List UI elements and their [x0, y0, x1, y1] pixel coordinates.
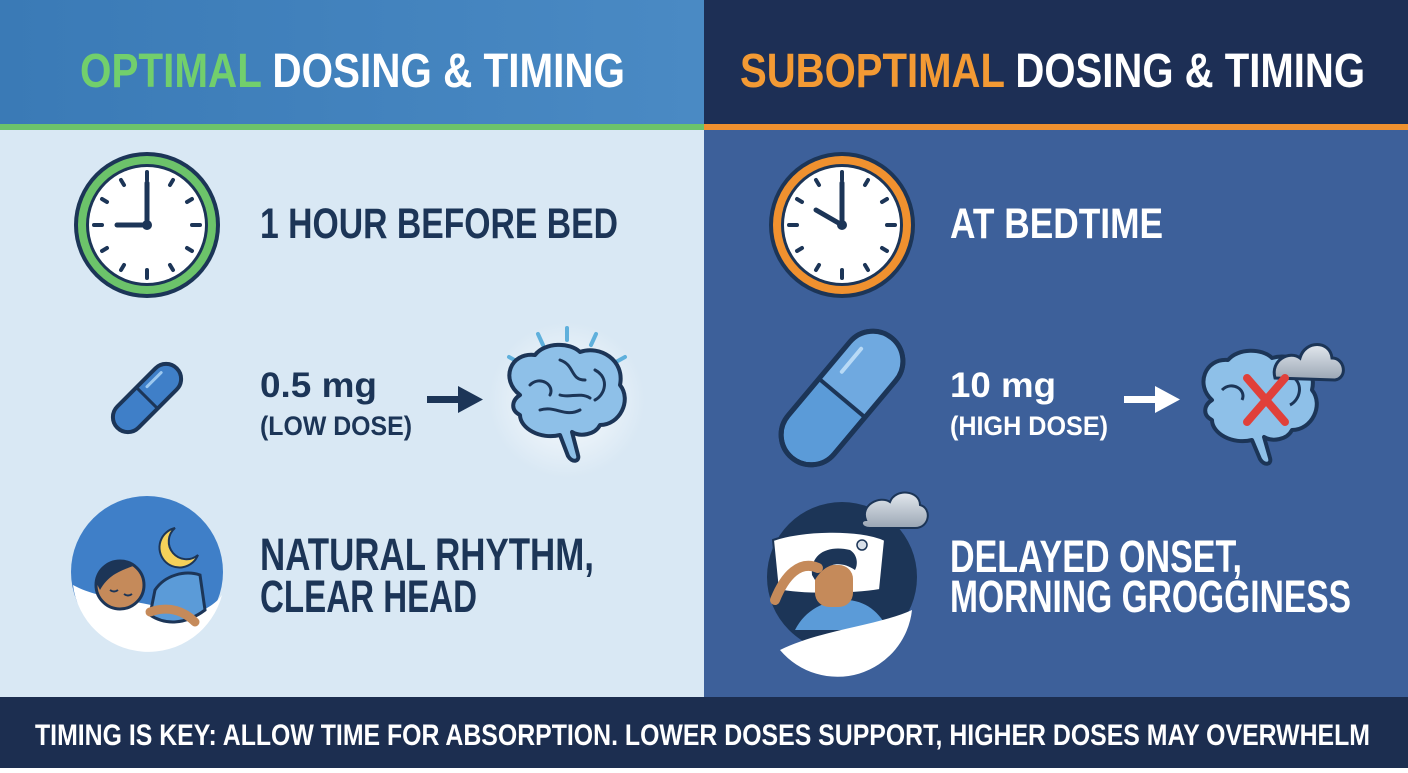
icon: small pill — [107, 358, 187, 438]
icon: green clock — [74, 152, 220, 298]
icon: foggy brain — [1203, 344, 1343, 464]
icon: sleeping person — [71, 496, 223, 652]
text: natural rhythm: CLEAR HEAD — [260, 571, 477, 622]
arrow: left — [427, 386, 483, 413]
text: 1 hour before bed: 1 HOUR BEFORE BED — [260, 200, 618, 248]
text: 0.5 mg: (LOW DOSE) — [260, 411, 412, 441]
icon: orange clock — [769, 152, 915, 298]
text: 0.5 mg — [260, 366, 412, 441]
text: delayed onset: DELAYED ONSET, — [950, 531, 1242, 582]
text: delayed onset — [950, 531, 1351, 622]
text: natural rhythm — [260, 529, 594, 622]
text: 10 mg: 10 mg — [950, 366, 1056, 405]
title: optimal: OPTIMAL DOSING & TIMING — [80, 45, 625, 98]
text: at bedtime: AT BEDTIME — [950, 200, 1163, 248]
arrow: right — [1124, 386, 1180, 413]
icon: bright brain — [489, 322, 645, 478]
footer — [0, 697, 1408, 768]
text: 10 mg: (HIGH DOSE) — [950, 411, 1108, 441]
text: 0.5 mg: 0.5 mg — [260, 366, 377, 405]
icon: groggy person — [767, 493, 928, 677]
text: natural rhythm: NATURAL RHYTHM, — [260, 529, 594, 580]
text: 10 mg — [950, 366, 1108, 441]
icon: large pill — [769, 319, 915, 477]
